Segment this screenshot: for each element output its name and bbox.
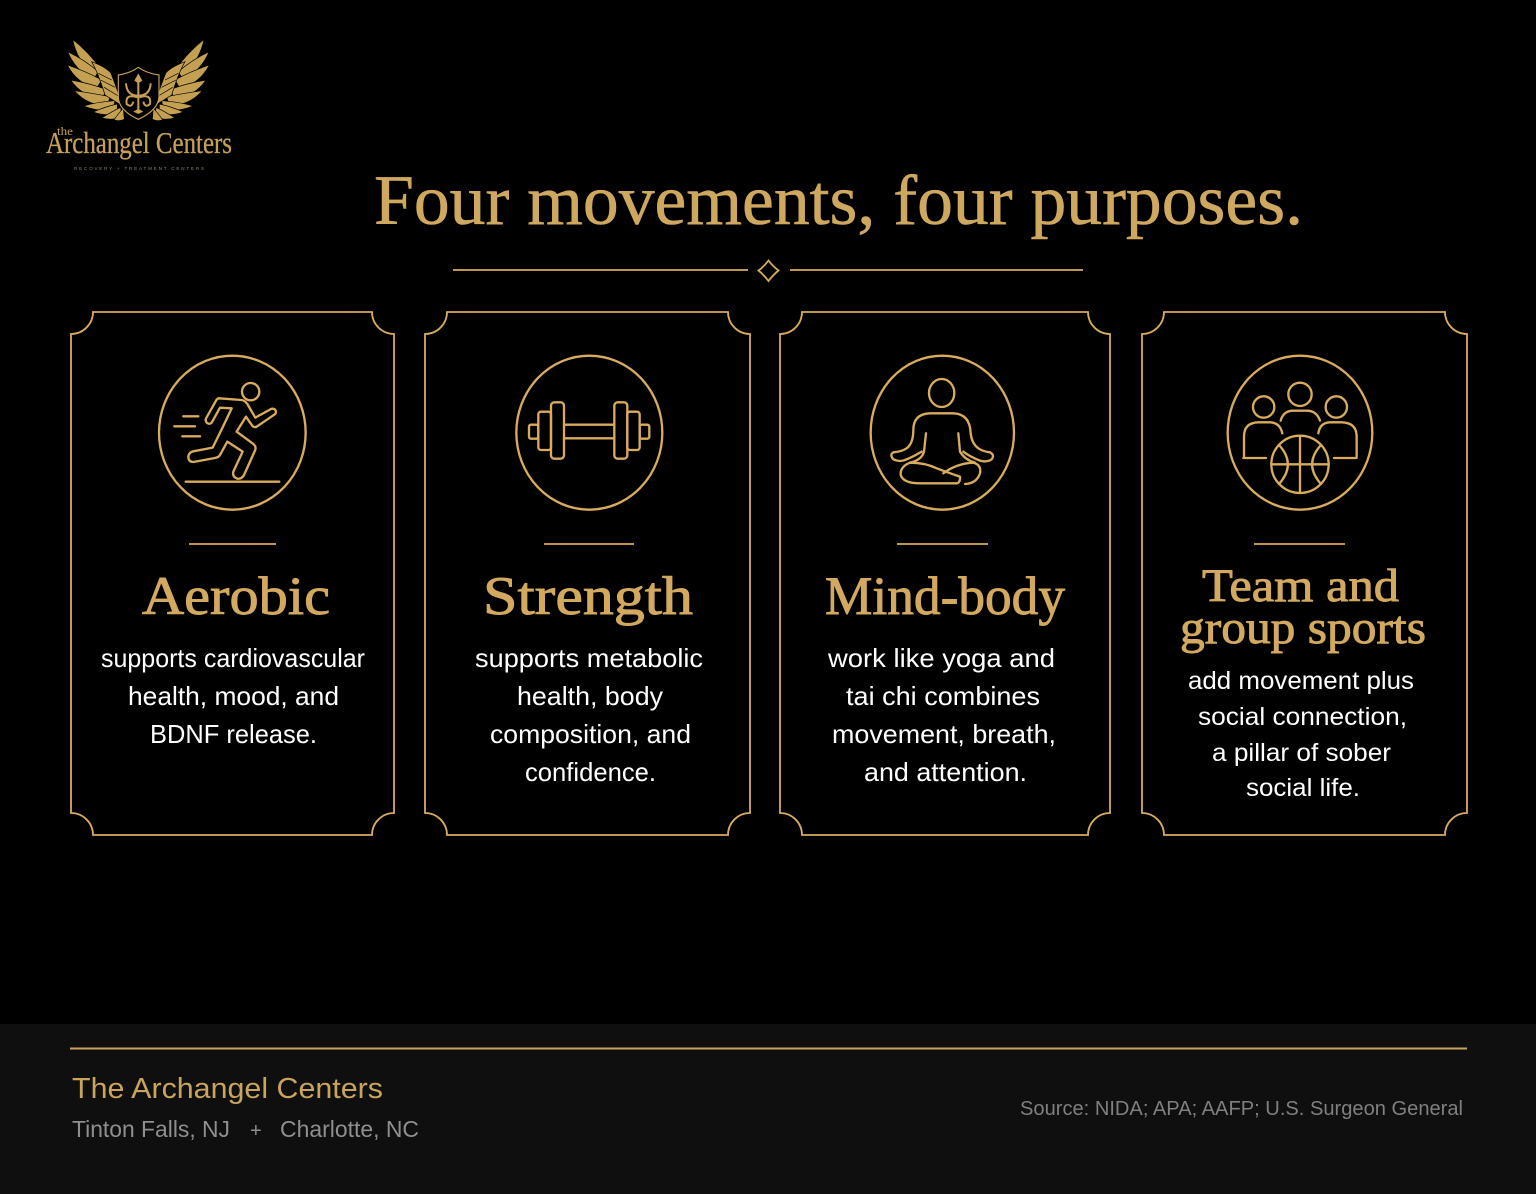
logo: The Archangel Centers bbox=[46, 39, 232, 171]
description bbox=[101, 643, 365, 749]
description: a pillar of sober bbox=[1212, 739, 1391, 767]
panel: Mind-body bbox=[780, 312, 1110, 835]
description: supports metabolic bbox=[475, 643, 703, 673]
card frame bbox=[1142, 312, 1467, 835]
description: add movement plus bbox=[1188, 667, 1414, 695]
heading: Mind-body bbox=[825, 566, 1065, 626]
logo wordmark: Archangel Centers bbox=[46, 125, 232, 160]
panel: Strength bbox=[425, 312, 750, 835]
logo wings and shield bbox=[67, 39, 209, 121]
title: Four movements, four purposes. bbox=[374, 162, 1303, 240]
heading bbox=[1180, 560, 1426, 654]
card frame bbox=[425, 312, 750, 835]
icon: team with basketball bbox=[1228, 356, 1372, 510]
logo wordmark: RECOVERY + TREATMENT CENTERS bbox=[74, 166, 204, 171]
description: BDNF release. bbox=[150, 719, 317, 749]
divider bbox=[544, 543, 634, 545]
description: movement, breath, bbox=[832, 719, 1056, 749]
card frame bbox=[71, 312, 394, 835]
description bbox=[1188, 667, 1414, 802]
description: supports cardiovascular bbox=[101, 643, 365, 673]
heading: Aerobic bbox=[142, 566, 330, 626]
title ornament divider bbox=[453, 260, 1083, 281]
description bbox=[827, 643, 1056, 787]
organisation name: The Archangel Centers bbox=[72, 1073, 383, 1105]
card frame bbox=[780, 312, 1110, 835]
heading: Team and bbox=[1202, 560, 1399, 612]
description: tai chi combines bbox=[846, 681, 1040, 711]
footer bbox=[0, 1024, 1536, 1194]
description: health, body bbox=[517, 681, 663, 711]
description: work like yoga and bbox=[827, 643, 1055, 673]
locations: Charlotte, NC bbox=[280, 1116, 419, 1142]
logo wordmark: the bbox=[57, 126, 73, 138]
logo wordmark bbox=[46, 125, 232, 171]
footer rule bbox=[70, 1048, 1467, 1050]
description: composition, and bbox=[490, 719, 691, 749]
source: Source: NIDA; APA; AAFP; U.S. Surgeon General bbox=[1020, 1098, 1463, 1120]
description bbox=[475, 643, 703, 787]
panel: Team and group sports bbox=[1142, 312, 1467, 835]
heading: Strength bbox=[483, 566, 693, 626]
icon: dumbbell bbox=[516, 356, 662, 510]
icon: runner bbox=[159, 356, 306, 510]
locations: Tinton Falls, NJ bbox=[72, 1116, 230, 1142]
description: health, mood, and bbox=[128, 681, 339, 711]
description: social life. bbox=[1246, 774, 1360, 802]
icon: meditation bbox=[871, 356, 1014, 510]
divider bbox=[1254, 543, 1345, 545]
locations bbox=[72, 1116, 419, 1142]
description: confidence. bbox=[525, 757, 656, 787]
description: and attention. bbox=[864, 757, 1027, 787]
divider bbox=[897, 543, 988, 545]
locations: + bbox=[250, 1120, 262, 1142]
divider bbox=[189, 543, 276, 545]
heading: group sports bbox=[1180, 602, 1426, 654]
footer background bbox=[0, 1024, 1536, 1194]
description: social connection, bbox=[1198, 703, 1407, 731]
panel: Aerobic bbox=[71, 312, 394, 835]
